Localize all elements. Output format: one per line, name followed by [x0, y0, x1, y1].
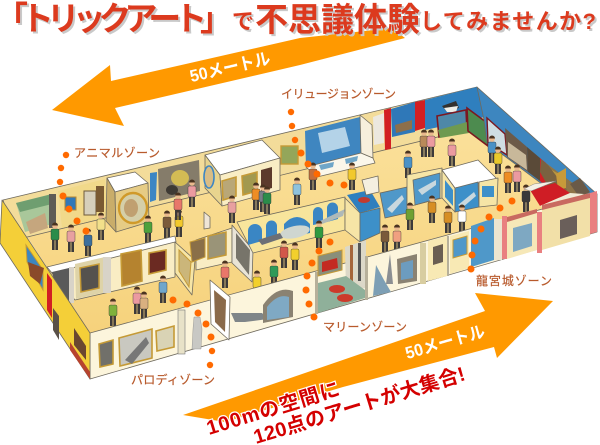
middle wall: parody room	[47, 236, 195, 305]
zone label: Ryugu castle: 龍宮城ゾーン	[476, 273, 552, 288]
zone label: marine: マリーンゾーン	[323, 320, 407, 334]
title: してみませんか?	[420, 9, 596, 34]
title: 「トリックアート」	[0, 0, 233, 37]
left wall	[0, 200, 90, 379]
zone label: parody: パロディゾーン	[131, 372, 215, 387]
arrow: top 50 metres pointing left: 50メートル	[188, 49, 272, 86]
title: で	[232, 9, 254, 34]
zone label: Ryugu castle	[468, 198, 552, 288]
marine panels	[362, 160, 498, 218]
arrow: bottom 50 metres pointing right	[183, 293, 553, 422]
throne and statues	[540, 159, 590, 198]
middle wall: blue arches	[237, 197, 345, 253]
white picture room	[204, 140, 280, 206]
arrow: top 50 metres pointing left	[52, 28, 405, 126]
middle wall: back pictures	[190, 212, 253, 282]
zone label: animal	[57, 146, 160, 234]
front wall	[90, 191, 597, 379]
museum floor	[3, 87, 597, 333]
arrow: bottom 50 metres pointing right: 50メートル	[403, 322, 487, 363]
callout: 100m / 120 artworks: 100mの空間に	[204, 377, 342, 440]
title: 不思議体験	[255, 1, 420, 38]
blue room	[345, 190, 380, 242]
people: back area	[51, 130, 530, 252]
zone label: illusion	[281, 87, 396, 188]
floor plan illustration	[0, 87, 597, 379]
title	[0, 0, 596, 38]
right wall	[477, 87, 597, 205]
back wall	[3, 87, 488, 240]
red bed	[524, 181, 584, 209]
zone label: parody	[131, 296, 215, 387]
zone label: marine	[302, 238, 407, 334]
people: front room	[84, 196, 466, 326]
zone label: animal: アニマルゾーン	[74, 146, 160, 160]
zone label: illusion: イリュージョンゾーン	[281, 87, 396, 101]
animal room box	[106, 172, 149, 232]
